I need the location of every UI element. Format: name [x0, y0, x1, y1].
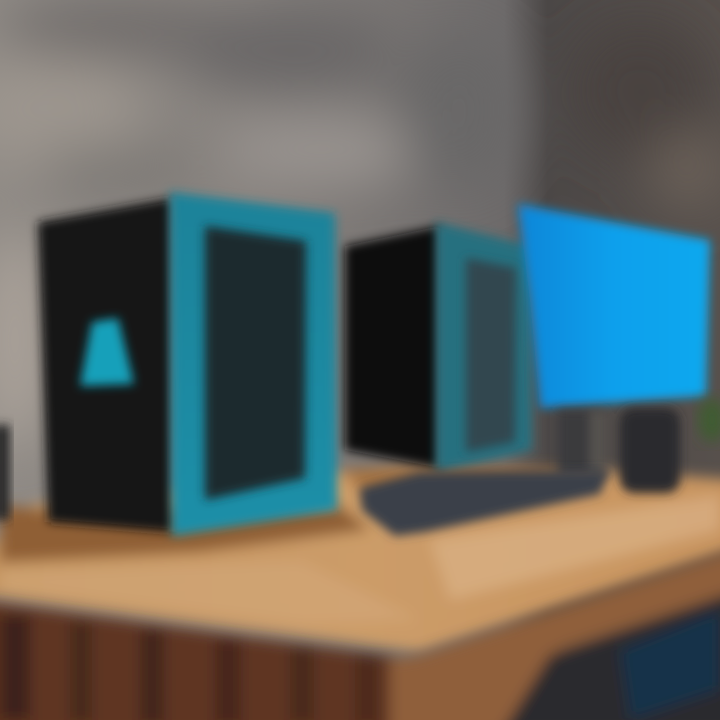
tower 1: [38, 192, 337, 536]
inner mesh panel: [205, 226, 306, 500]
blue screen: [518, 204, 710, 408]
black side panel: [345, 226, 440, 468]
desk front edge: [0, 548, 720, 720]
monitor: [518, 204, 720, 493]
teal front frame: [436, 222, 532, 472]
keyboard: [360, 470, 610, 536]
inner mesh panel: [466, 258, 516, 452]
plant: [698, 398, 720, 442]
tower 2: [345, 222, 532, 472]
teal front frame: [170, 192, 337, 536]
monitor stand: [558, 408, 680, 493]
teal logo icon: [80, 318, 134, 386]
dark side panel: [38, 198, 172, 532]
desk top: [0, 465, 720, 652]
far-left object: [0, 425, 10, 520]
